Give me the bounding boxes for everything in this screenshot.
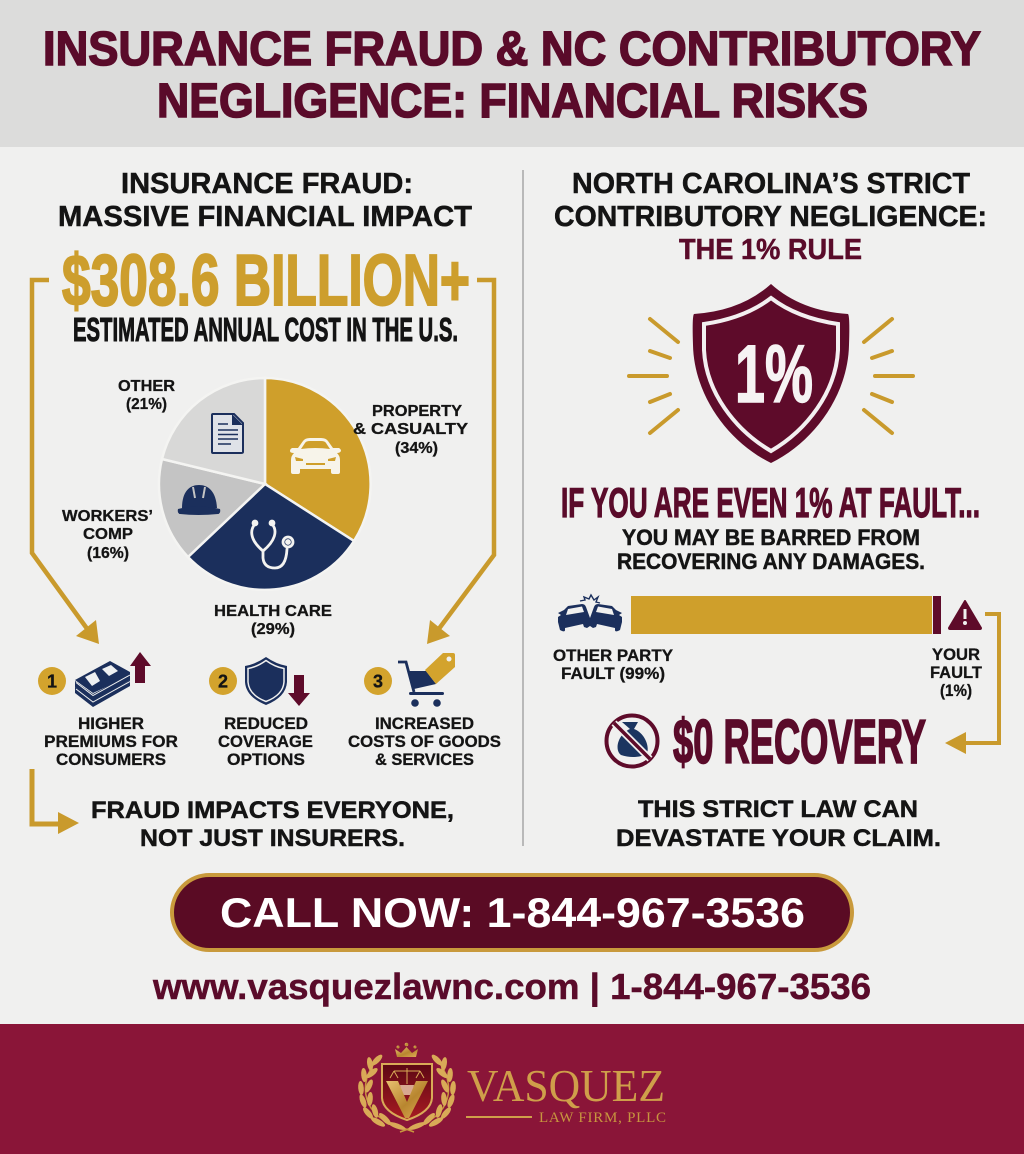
right summary	[616, 796, 941, 852]
right heading: CONTRIBUTORY NEGLIGENCE:	[554, 201, 987, 233]
arrow: right to item 3	[427, 280, 494, 644]
icon: car crash	[558, 595, 622, 631]
icon: shopping cart	[398, 662, 444, 707]
pie label: health care	[214, 603, 332, 638]
label: increased costs: COSTS OF GOODS	[348, 732, 501, 751]
label: reduced coverage: REDUCED	[224, 714, 308, 733]
call to action button	[172, 875, 852, 950]
label: your fault: (1%)	[940, 681, 972, 700]
logo: wordmark: VASQUEZ	[467, 1061, 665, 1111]
title band: NEGLIGENCE: FINANCIAL RISKS	[157, 75, 868, 128]
label: your fault: YOUR	[932, 645, 980, 664]
label: reduced coverage	[218, 714, 313, 769]
left car	[558, 604, 590, 631]
label: higher premiums: PREMIUMS FOR	[44, 732, 178, 751]
fault explanation: RECOVERING ANY DAMAGES.	[617, 549, 925, 574]
icon: warning	[949, 601, 981, 629]
right panel: contributory negligence	[553, 168, 999, 852]
headline statistic	[62, 241, 470, 348]
right summary: DEVASTATE YOUR CLAIM.	[616, 825, 941, 852]
item 3: increased costs	[348, 653, 501, 769]
left heading	[58, 168, 472, 233]
slice: property and casualty	[265, 378, 371, 541]
badge 3	[364, 667, 392, 695]
pie label: property and casualty: PROPERTY	[372, 403, 462, 420]
left summary: NOT JUST INSURERS.	[140, 825, 405, 852]
left panel: insurance fraud	[32, 168, 501, 852]
crown	[395, 1043, 418, 1057]
label: reduced coverage: OPTIONS	[227, 750, 305, 769]
label: higher premiums	[44, 714, 178, 769]
label: other party fault: OTHER PARTY	[553, 646, 674, 665]
fault explanation	[617, 525, 925, 574]
badge 2: 2	[218, 672, 228, 692]
label: your fault	[930, 645, 983, 700]
icon: up arrow	[130, 652, 151, 683]
icon: stethoscope	[252, 521, 293, 568]
icon: price tag	[425, 653, 455, 684]
icon: car	[290, 438, 341, 474]
pie label: workers comp: COMP	[83, 526, 133, 543]
wreath left	[358, 1053, 414, 1132]
icon: no money	[606, 716, 658, 766]
label: other party fault: FAULT (99%)	[561, 664, 665, 683]
label: increased costs: & SERVICES	[375, 750, 474, 769]
footer band	[0, 1024, 1024, 1154]
crest shield	[382, 1064, 432, 1120]
pie label: other	[118, 378, 175, 413]
pie label: other: (21%)	[126, 396, 167, 413]
left summary	[91, 797, 454, 852]
pie label: property and casualty	[353, 403, 468, 457]
label: increased costs	[348, 714, 501, 769]
badge 1: 1	[47, 672, 57, 692]
right car	[590, 604, 622, 631]
left heading: INSURANCE FRAUD:	[121, 168, 413, 200]
icon: document	[212, 414, 243, 453]
pie label: workers comp	[62, 508, 153, 562]
left summary: FRAUD IMPACTS EVERYONE,	[91, 797, 454, 824]
badge 3: 3	[373, 672, 383, 692]
pie label: property and casualty: & CASUALTY	[353, 421, 468, 438]
title band: INSURANCE FRAUD & NC CONTRIBUTORY	[43, 23, 981, 76]
right heading: THE 1% RULE	[679, 234, 862, 266]
logo: wordmark: LAW FIRM, PLLC	[539, 1110, 666, 1126]
right summary: THIS STRICT LAW CAN	[638, 796, 918, 823]
label: your fault: FAULT	[930, 663, 983, 682]
website and phone: www.vasquezlawnc.com | 1-844-967-3536	[152, 966, 871, 1008]
headline statistic: ESTIMATED ANNUAL COST IN THE U.S.	[73, 311, 458, 348]
arrow: to summary	[32, 769, 79, 834]
icon: 1% shield	[693, 284, 849, 463]
icon: down arrow	[288, 675, 310, 706]
arrow: fault to recovery	[945, 614, 999, 754]
pie label: workers comp: WORKERS’	[62, 508, 153, 525]
pie label: other: OTHER	[118, 378, 175, 395]
icon: cash stack	[75, 661, 130, 707]
rays	[629, 319, 913, 433]
label: higher premiums: HIGHER	[78, 714, 144, 733]
wreath right	[400, 1053, 456, 1132]
title band	[0, 0, 1024, 147]
icon: 1% shield: 1%	[735, 329, 813, 420]
arrow: left to item 1	[32, 280, 99, 644]
icon: shield	[245, 657, 287, 705]
call to action button: CALL NOW: 1-844-967-3536	[220, 889, 805, 936]
right heading	[554, 168, 987, 266]
crest scales and column	[390, 1068, 424, 1095]
fault bar	[631, 596, 941, 634]
right heading: NORTH CAROLINA’S STRICT	[572, 168, 970, 200]
pie label: workers comp: (16%)	[87, 545, 129, 562]
fault explanation: YOU MAY BE BARRED FROM	[622, 525, 920, 550]
item 2: reduced coverage	[209, 657, 313, 769]
left heading: MASSIVE FINANCIAL IMPACT	[58, 201, 472, 233]
slice: workers comp	[159, 459, 265, 557]
icon: hard hat	[178, 485, 220, 515]
crest v	[386, 1081, 428, 1118]
label: higher premiums: CONSUMERS	[56, 750, 166, 769]
logo: crest	[358, 1043, 456, 1132]
pie chart	[159, 378, 371, 590]
headline statistic: $308.6 BILLION+	[62, 241, 470, 321]
slice: other	[162, 378, 265, 484]
pie label: health care: HEALTH CARE	[214, 603, 332, 620]
pie label: property and casualty: (34%)	[395, 440, 438, 457]
slice: health care	[188, 484, 354, 590]
label: other party fault	[553, 646, 674, 683]
pie label: health care: (29%)	[251, 621, 295, 638]
label: reduced coverage: COVERAGE	[218, 732, 313, 751]
label: increased costs: INCREASED	[375, 714, 474, 733]
item 1: higher premiums	[38, 652, 178, 769]
